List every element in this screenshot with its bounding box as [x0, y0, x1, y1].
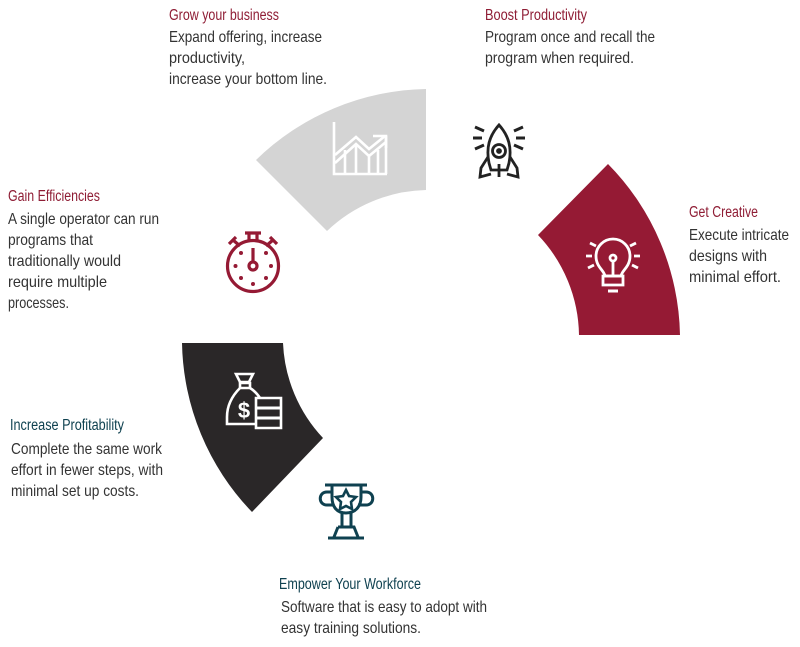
icon: light bulb [586, 239, 640, 291]
text block: get creative: minimal effort. [689, 269, 781, 286]
text block: get creative: designs with [689, 248, 767, 265]
text block: grow your business: productivity, [169, 50, 245, 67]
icon: stopwatch [228, 233, 278, 292]
icon: rocket [473, 125, 525, 177]
text block: boost productivity [485, 7, 655, 67]
text block: gain efficiencies: processes. [8, 295, 69, 312]
text block: grow your business [169, 7, 327, 88]
icon: money bag: $ [238, 398, 250, 423]
text block: empower your workforce: Software that is easy to adopt with [281, 599, 487, 616]
text block: empower your workforce: easy training solutions. [281, 620, 421, 637]
text block: gain efficiencies: programs that [8, 232, 93, 249]
text block: gain efficiencies: traditionally would [8, 253, 121, 270]
text block: gain efficiencies: Gain Efficiencies [8, 188, 100, 205]
panel: grey sector [256, 89, 426, 231]
text block: increase profitability: minimal set up costs. [11, 483, 139, 500]
icon: trophy [320, 485, 373, 538]
text block: get creative [689, 204, 789, 286]
text block: empower your workforce [279, 576, 487, 637]
text block: empower your workforce: Empower Your Workforce [279, 576, 421, 593]
panel: black sector [182, 343, 323, 512]
panel: red sector [538, 164, 680, 335]
text block: increase profitability: effort in fewer steps, with [11, 462, 163, 479]
text block: get creative: Get Creative [689, 204, 758, 221]
icon: money bag [227, 374, 281, 428]
text block: gain efficiencies: A single operator can run [8, 211, 159, 228]
text block: increase profitability: Complete the same work [11, 441, 163, 458]
text block: grow your business: Expand offering, increase [169, 29, 322, 46]
text block: gain efficiencies [8, 188, 159, 312]
icon: growth chart [334, 122, 387, 174]
text block: grow your business: increase your bottom line. [169, 71, 327, 88]
text block: boost productivity: Boost Productivity [485, 7, 587, 24]
text block: boost productivity: Program once and recall the [485, 29, 655, 46]
text block: increase profitability: Increase Profitability [10, 417, 124, 434]
text block: increase profitability [10, 417, 163, 500]
text block: boost productivity: program when required. [485, 50, 634, 67]
text block: gain efficiencies: require multiple [8, 274, 107, 291]
text block: grow your business: Grow your business [169, 7, 279, 24]
